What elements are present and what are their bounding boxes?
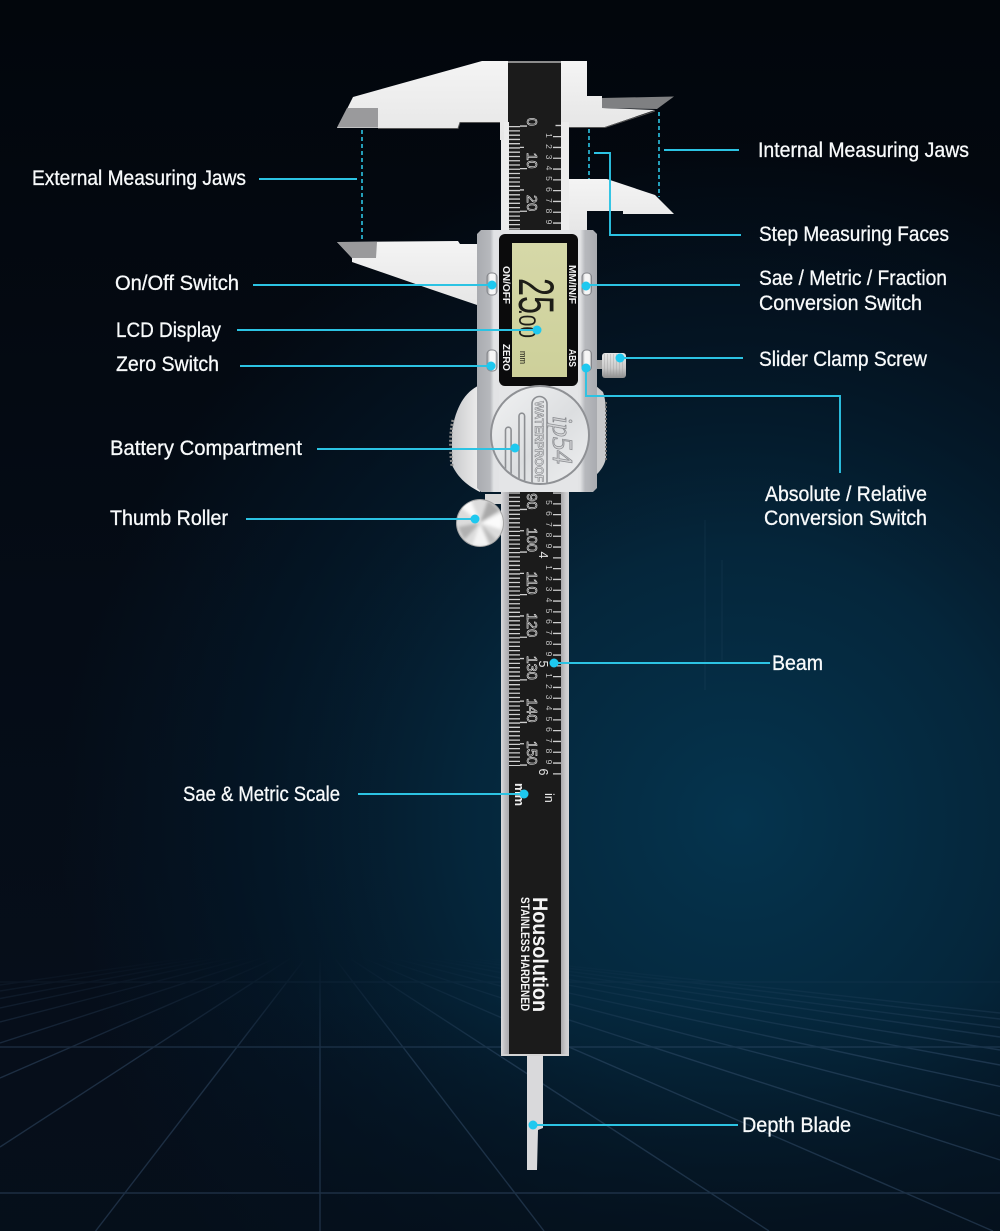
leader: lcd display <box>237 326 542 334</box>
inch scale numbers: 5 <box>536 661 550 668</box>
label: absolute relative conversion switch: Conversion Switch <box>764 507 927 530</box>
inch scale numbers: 8 <box>544 749 554 754</box>
label: battery compartment: Battery Compartment <box>110 437 302 460</box>
inch scale numbers: 7 <box>544 738 554 743</box>
metric scale numbers: 150 <box>523 741 539 765</box>
leader: internal measuring jaws <box>659 112 739 197</box>
inch scale numbers: 6 <box>544 727 554 732</box>
brand text: STAINLESS HARDENED <box>518 897 532 1011</box>
label: slider clamp screw: Slider Clamp Screw <box>759 348 928 371</box>
unit marks <box>512 783 556 806</box>
brand text: Housolution <box>528 897 551 1012</box>
leader: thumb roller <box>246 514 480 524</box>
unit marks: in <box>542 793 556 803</box>
inch scale numbers: 9 <box>544 544 554 549</box>
button labels: ON/OFF <box>500 266 512 305</box>
inch scale numbers: 4 <box>544 166 554 171</box>
leader: conversion switch <box>582 282 740 290</box>
label: internal measuring jaws: Internal Measuring Jaws <box>758 139 969 162</box>
leader: beam <box>550 658 770 668</box>
label: sae metric fraction conversion switch: Conversion Switch <box>759 292 922 315</box>
slider clamp screw <box>596 353 626 378</box>
depth blade <box>527 1050 543 1170</box>
inch scale numbers: 7 <box>544 522 554 527</box>
button labels: ZERO <box>500 344 512 371</box>
leader: battery compartment <box>317 444 520 452</box>
inch scale numbers: 5 <box>544 717 554 722</box>
inch scale numbers: 4 <box>544 598 554 603</box>
inch scale numbers: 3 <box>544 587 554 592</box>
lcd digits <box>508 278 564 364</box>
leader: zero switch <box>240 362 496 370</box>
lcd digits: mm <box>518 351 528 364</box>
inch scale numbers: 4 <box>536 552 550 559</box>
inch scale numbers: 6 <box>544 619 554 624</box>
button labels <box>500 265 578 371</box>
beam <box>501 62 569 1056</box>
label: absolute relative conversion switch: Absolute / Relative <box>765 483 927 506</box>
button labels: ABS <box>566 349 578 367</box>
label: sae metric fraction conversion switch: Sae / Metric / Fraction <box>759 267 947 290</box>
label: step measuring faces: Step Measuring Faces <box>759 223 949 246</box>
caliper <box>337 61 674 1170</box>
inch scale numbers: 9 <box>544 760 554 765</box>
inch scale numbers: 1 <box>544 565 554 570</box>
inch scale numbers: 6 <box>544 511 554 516</box>
switches <box>487 273 592 371</box>
inch scale numbers: 2 <box>544 576 554 581</box>
inch scale numbers: 3 <box>544 695 554 700</box>
inch scale numbers: 9 <box>544 220 554 225</box>
inch scale numbers: 8 <box>544 533 554 538</box>
inch scale numbers: 7 <box>544 198 554 203</box>
metric scale numbers: 100 <box>523 528 539 552</box>
inch scale numbers: 6 <box>544 187 554 192</box>
label: zero switch: Zero Switch <box>116 353 219 376</box>
inch scale numbers <box>536 133 554 776</box>
leader: slider clamp screw <box>616 354 743 362</box>
metric scale numbers: 10 <box>523 152 539 169</box>
metric scale numbers: 0 <box>523 118 539 126</box>
inch scale numbers: 8 <box>544 209 554 214</box>
ip54 text: ip54 <box>546 416 578 464</box>
waterproof text: WATERPROOF <box>532 401 546 482</box>
metric scale numbers: 110 <box>523 571 539 595</box>
lower sliding jaw, left <box>337 241 480 306</box>
slider body <box>477 230 597 492</box>
label: on/off switch: On/Off Switch <box>115 272 239 295</box>
lcd digits: .00 <box>513 309 540 338</box>
scale ticks <box>514 125 561 776</box>
inch scale numbers: 1 <box>544 133 554 138</box>
inch scale numbers: 9 <box>544 652 554 657</box>
inch scale numbers: 2 <box>544 144 554 149</box>
inch scale numbers: 5 <box>544 500 554 505</box>
battery compartment dial <box>490 385 590 490</box>
label: external measuring jaws: External Measuring Jaws <box>32 167 246 190</box>
perspective floor grid <box>0 978 1000 1231</box>
inch scale numbers: 1 <box>544 673 554 678</box>
leader: depth blade <box>528 1120 738 1130</box>
metric scale numbers: 20 <box>523 195 539 211</box>
label: sae and metric scale: Sae & Metric Scale <box>183 783 340 806</box>
label: depth blade: Depth Blade <box>742 1114 851 1137</box>
label: absolute relative conversion switch <box>764 483 927 530</box>
inch scale numbers: 2 <box>544 684 554 689</box>
label: sae metric fraction conversion switch <box>759 267 947 315</box>
inch scale numbers: 7 <box>544 630 554 635</box>
leader: absolute relative switch <box>582 364 840 473</box>
leader: sae and metric scale <box>358 790 528 798</box>
inch scale numbers: 5 <box>544 176 554 181</box>
label: beam: Beam <box>772 652 823 675</box>
leader: on/off switch <box>253 280 496 290</box>
inch scale numbers: 8 <box>544 641 554 646</box>
metric scale numbers: 140 <box>523 698 539 722</box>
leader: external measuring jaws <box>259 130 362 240</box>
inch scale numbers: 6 <box>536 769 550 776</box>
unit marks: mm <box>512 783 527 806</box>
label: lcd display: LCD Display <box>116 319 221 342</box>
lcd digits: 25 <box>508 278 564 314</box>
metric scale numbers: 90 <box>523 493 539 509</box>
button labels: MM/IN/F <box>566 265 578 305</box>
metric scale numbers: 120 <box>523 613 539 637</box>
lcd display <box>499 234 578 386</box>
lower sliding jaw, right <box>569 179 674 232</box>
brand text <box>518 897 551 1012</box>
inch scale numbers: 5 <box>544 609 554 614</box>
inch scale numbers: 4 <box>544 706 554 711</box>
upper fixed jaw <box>337 61 674 140</box>
leader: step measuring faces <box>589 129 741 235</box>
label: thumb roller: Thumb Roller <box>110 507 228 530</box>
metric scale numbers: 130 <box>523 656 539 680</box>
thumb roller <box>456 494 504 547</box>
inch scale numbers: 3 <box>544 155 554 160</box>
thumb wheel housing <box>451 385 606 492</box>
metric scale numbers <box>523 118 539 765</box>
